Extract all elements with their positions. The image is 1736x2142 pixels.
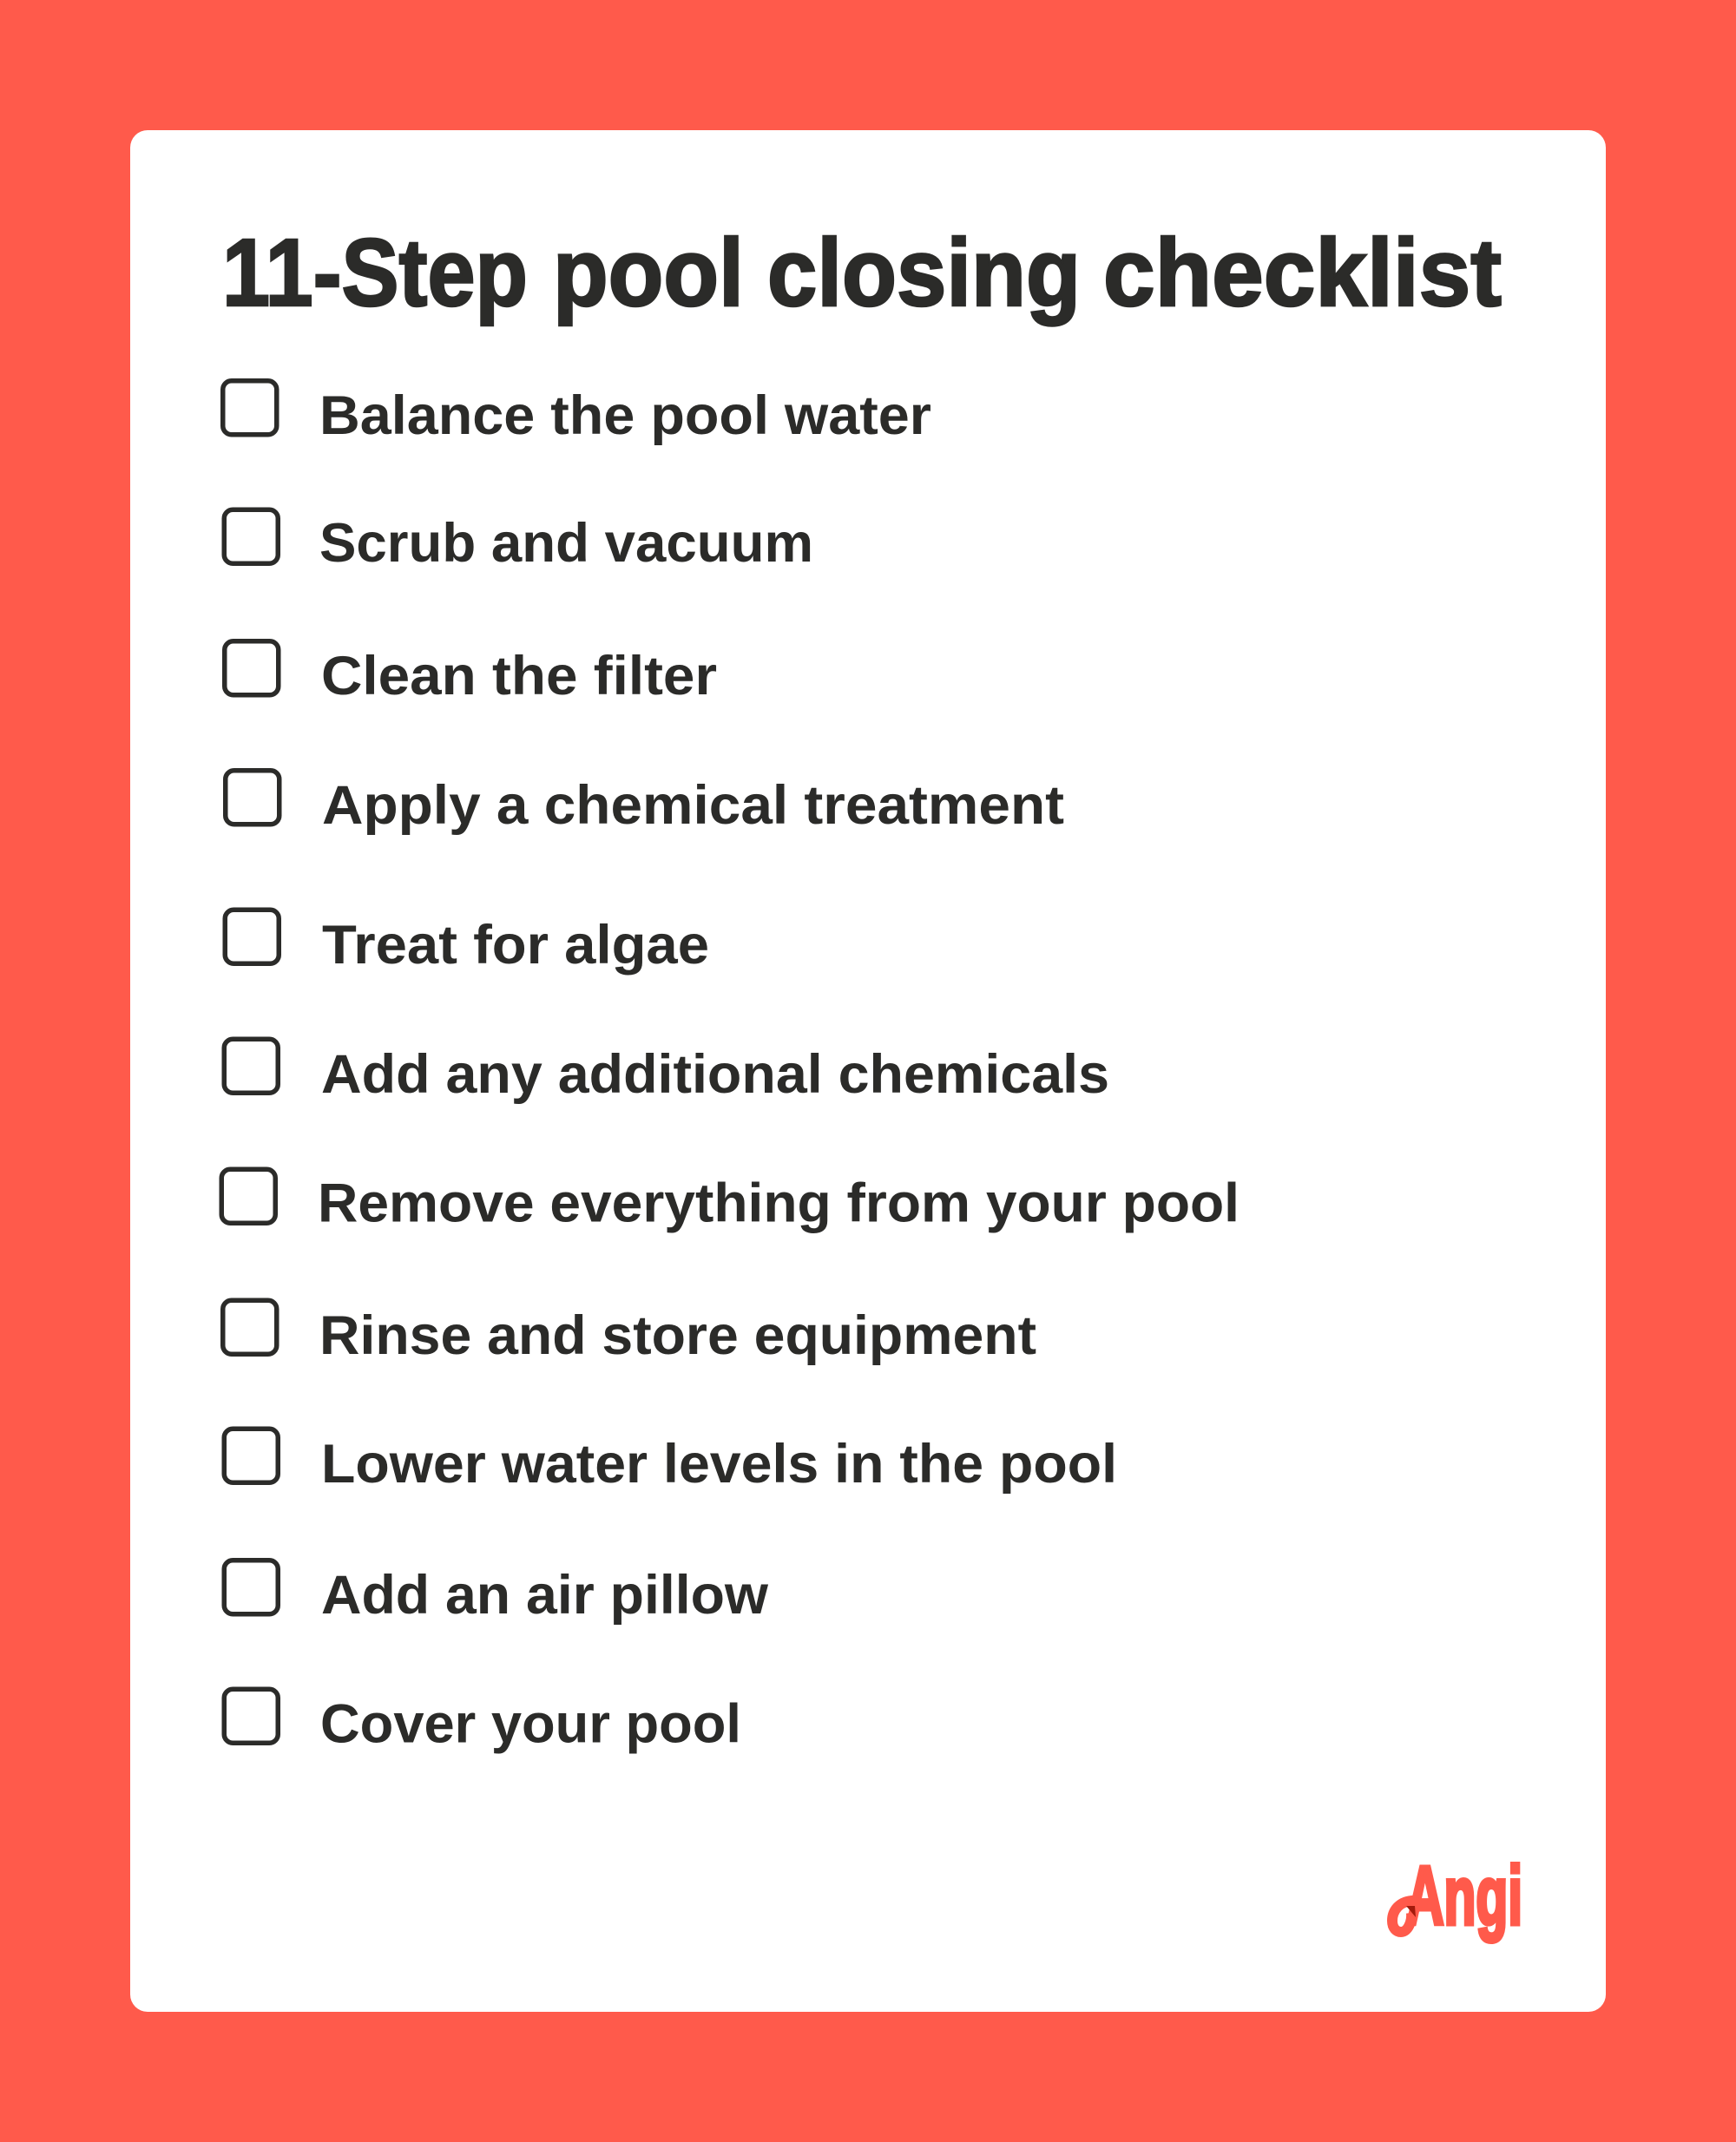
title: closing	[767, 220, 1081, 326]
checklist item: Add any additional chemicals: Add any additional chemicals	[321, 1044, 1109, 1105]
checklist item: Rinse and store equipment: Rinse and store equipment	[319, 1305, 1036, 1366]
title: 11-Step	[222, 220, 528, 326]
checklist item: Remove everything from your pool: Remove everything from your pool	[318, 1173, 1240, 1234]
checklist item: Balance the pool water: Balance the pool water	[319, 385, 931, 446]
checklist item: Add an air pillow: Add an air pillow	[321, 1565, 769, 1626]
checklist item: Lower water levels in the pool: Lower water levels in the pool	[321, 1434, 1117, 1495]
logo: Angi	[1392, 1850, 1522, 1942]
title	[222, 220, 1502, 326]
checklist item: Scrub and vacuum: Scrub and vacuum	[319, 513, 813, 574]
checklist item: Apply a chemical treatment: Apply a chemical treatment	[322, 775, 1064, 836]
checklist item: Cover your pool: Cover your pool	[320, 1694, 741, 1755]
title: pool	[553, 220, 744, 326]
title: checklist	[1103, 220, 1502, 326]
checklist item: Clean the filter: Clean the filter	[321, 646, 717, 706]
logo: Angi: Angi	[1406, 1850, 1522, 1942]
panel: checklist card	[130, 130, 1606, 2012]
checklist item: Treat for algae: Treat for algae	[322, 915, 709, 976]
